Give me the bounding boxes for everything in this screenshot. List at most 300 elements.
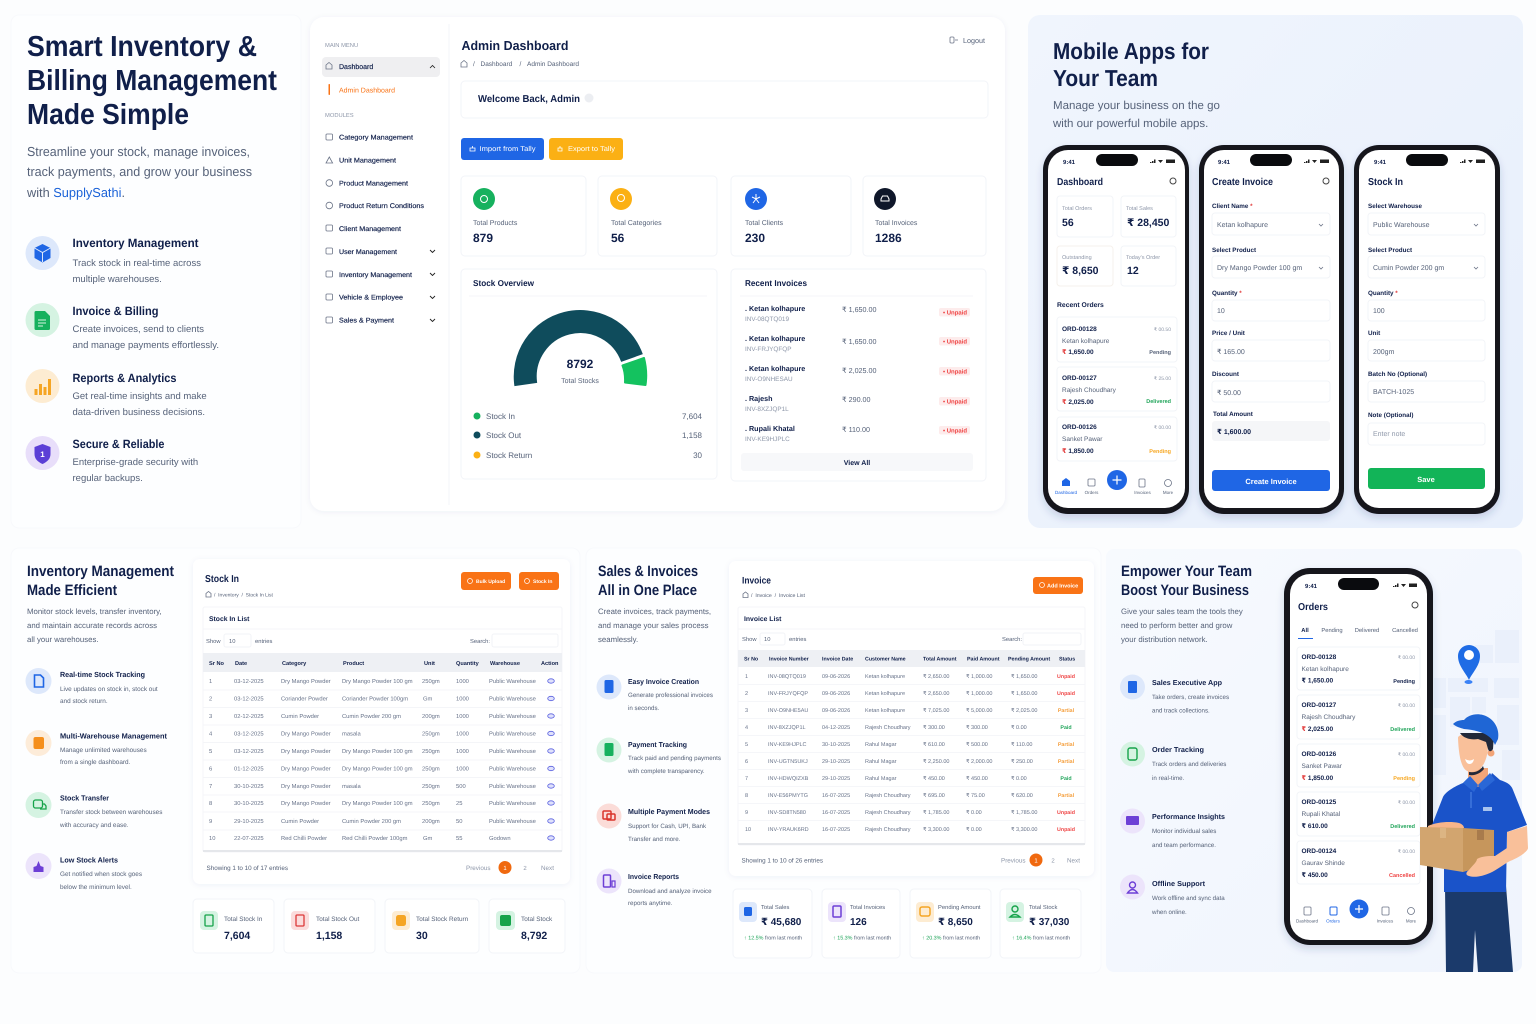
summary: total stock out: 1,158 bbox=[316, 930, 342, 942]
table: stock in: Public Warehouse bbox=[489, 713, 536, 720]
phone: orders: Pending bbox=[1393, 679, 1415, 685]
phone: orders: Orders bbox=[1326, 918, 1341, 924]
feature: payment tracking: with complete transparency. bbox=[627, 768, 705, 775]
card: stock in list: 10 bbox=[229, 638, 235, 645]
description bbox=[1052, 100, 1220, 130]
table: stock in: 03-12-2025 bbox=[234, 696, 264, 702]
description bbox=[598, 607, 711, 644]
table: invoices: ₹ 1,785.00 bbox=[1011, 809, 1037, 816]
feature: multiple payment modes: Transfer and more. bbox=[628, 836, 681, 843]
table: stock in: 03-12-2025 bbox=[234, 748, 264, 755]
button: bulk upload: Bulk Upload bbox=[476, 579, 505, 585]
table: stock in: 1000 bbox=[456, 713, 469, 720]
card: invoice list: Invoice List bbox=[744, 616, 782, 623]
table: stock in bbox=[203, 653, 562, 852]
button: stock in: Stock In bbox=[533, 579, 552, 585]
table: stock in: 2 bbox=[209, 696, 212, 702]
phone: orders: All bbox=[1301, 627, 1309, 634]
sidebar: Product Return Conditions bbox=[339, 203, 425, 210]
pagination: 1 bbox=[1034, 858, 1038, 864]
table: invoices: ₹ 3,300.00 bbox=[923, 826, 949, 833]
phone: orders: Gaurav Shinde bbox=[1302, 860, 1345, 867]
panel: recent invoices: INV-KE9HJPLC bbox=[745, 436, 790, 443]
phone: dashboard: ORD-00127 bbox=[1062, 375, 1097, 382]
phone: create invoice: ₹ 50.00 bbox=[1217, 389, 1241, 397]
card: invoice list bbox=[729, 561, 1094, 876]
table: invoices: 4 bbox=[745, 725, 748, 731]
card: stock in list: Search: bbox=[470, 638, 490, 645]
table: stock in: Cumin Powder 200 gm bbox=[342, 713, 401, 720]
phone: dashboard: Dashboard bbox=[1057, 177, 1103, 188]
phone: dashboard: Pending bbox=[1149, 449, 1171, 455]
phone: dashboard: Outstanding bbox=[1062, 255, 1092, 261]
sidebar: MODULES bbox=[325, 112, 354, 119]
panel: stock overview bbox=[461, 269, 717, 479]
table: invoices: 04-12-2025 bbox=[822, 725, 850, 731]
table: invoices: 29-10-2025 bbox=[822, 759, 850, 765]
panel: recent invoices: ₹ 2,025.00 bbox=[842, 366, 877, 375]
button: add invoice bbox=[1033, 577, 1083, 594]
card: invoice list: Show bbox=[742, 636, 757, 643]
table: stock in: Dry Mango Powder bbox=[281, 748, 331, 755]
feature: reports and analytics: data-driven business decisions. bbox=[72, 407, 205, 418]
summary: total stock return bbox=[385, 899, 479, 953]
phone: stock in: 200gm bbox=[1373, 349, 1395, 356]
feature: stock transfer: with accuracy and ease. bbox=[59, 822, 129, 829]
feature: multi-warehouse management: Multi-Warehouse Management bbox=[60, 732, 168, 740]
panel: recent invoices: • Unpaid bbox=[943, 338, 967, 346]
panel: recent invoices: • Unpaid bbox=[943, 428, 967, 434]
feature: sales executive app: and track collections. bbox=[1152, 708, 1210, 714]
table: invoices: 3 bbox=[745, 708, 748, 714]
sidebar: Unit Management bbox=[339, 158, 396, 164]
table: stock in: 1 bbox=[209, 679, 212, 685]
page header: Logout bbox=[963, 36, 985, 45]
table: stock in: masala bbox=[342, 783, 361, 790]
phone: dashboard: Invoices bbox=[1134, 490, 1152, 495]
feature: reports and analytics: Reports & Analytics bbox=[72, 371, 177, 385]
table: stock in: Public Warehouse bbox=[489, 766, 536, 772]
heading: Mobile Apps for bbox=[1053, 38, 1209, 64]
sidebar: Vehicle & Employee bbox=[339, 294, 403, 302]
heading: Inventory Management bbox=[27, 563, 174, 580]
table: stock in: Coriander Powder bbox=[281, 696, 328, 702]
table: invoices: 8 bbox=[745, 793, 748, 799]
feature: inventory management: multiple warehouses. bbox=[72, 274, 162, 285]
feature: inventory management: Track stock in real-time across bbox=[72, 258, 201, 269]
table: stock in: Red Chilli Powder bbox=[281, 835, 327, 842]
legend: Stock In bbox=[486, 412, 515, 421]
table: stock in: 250gm bbox=[422, 730, 440, 738]
panel: recent invoices: . Ketan kolhapure bbox=[745, 334, 805, 343]
table: invoices: INV-KE9HJPLC bbox=[768, 742, 807, 748]
phone: create invoice: 9:41 bbox=[1218, 159, 1231, 166]
panel: sales and invoices section bbox=[586, 548, 1101, 973]
phone: dashboard: Total Orders bbox=[1062, 206, 1092, 212]
description bbox=[1121, 607, 1243, 644]
title: Made Simple bbox=[27, 99, 189, 131]
phone: orders: Cancelled bbox=[1392, 627, 1418, 634]
phone: create invoice: Create Invoice bbox=[1245, 477, 1297, 486]
table: invoices: ₹ 500.00 bbox=[966, 741, 988, 748]
page header: Admin Dashboard bbox=[462, 38, 569, 53]
table: invoices: Pending Amount bbox=[1008, 656, 1050, 662]
feature: stock transfer: Stock Transfer bbox=[60, 794, 109, 802]
phone: create invoice: Ketan kolhapure bbox=[1217, 221, 1268, 229]
card: stock in list: / Inventory / Stock In List bbox=[214, 592, 274, 598]
table: stock in: 02-12-2025 bbox=[234, 713, 264, 720]
table: stock in: Godown bbox=[489, 835, 511, 842]
table: stock in: Action bbox=[541, 660, 559, 667]
table: invoices: INV-UGTN5UKJ bbox=[768, 759, 808, 765]
summary: total sales: ₹ 45,680 bbox=[761, 917, 802, 928]
description: Give your sales team the tools they bbox=[1121, 607, 1243, 616]
phone: stock in: Select Product bbox=[1368, 247, 1413, 254]
summary: total stock in bbox=[193, 899, 274, 953]
table: invoices: Partial bbox=[1058, 759, 1075, 765]
table: invoices: INV-08QTQ019 bbox=[768, 674, 806, 680]
phone: dashboard: 12 bbox=[1127, 265, 1139, 277]
heading bbox=[1121, 563, 1252, 599]
table: stock in: 6 bbox=[209, 766, 212, 772]
table: stock in: Dry Mango Powder bbox=[281, 800, 331, 807]
panel: team empowerment section bbox=[1106, 549, 1528, 972]
feature: easy invoice creation: in seconds. bbox=[628, 705, 660, 712]
description: and manage your sales process bbox=[598, 621, 709, 630]
table: invoices: Paid Amount bbox=[967, 656, 1000, 662]
button: stock in bbox=[519, 572, 559, 590]
table: invoices: INV-HDWQIZXB bbox=[768, 776, 809, 782]
table: invoices: INV-SD8TN580 bbox=[768, 810, 806, 816]
table: invoices: ₹ 1,650.00 bbox=[1011, 673, 1037, 680]
panel: recent invoices: ₹ 110.00 bbox=[842, 425, 870, 434]
table: invoices: Invoice Number bbox=[769, 656, 809, 662]
table: invoices: ₹ 1,785.00 bbox=[923, 809, 949, 816]
feature: low stock alerts bbox=[26, 853, 142, 891]
stat card: total clients: Total Clients bbox=[745, 219, 784, 227]
summary: total stock return: Total Stock Return bbox=[416, 916, 469, 923]
heading: Your Team bbox=[1053, 65, 1158, 91]
feature: secure and reliable bbox=[26, 436, 198, 484]
phone: create invoice: Price / Unit bbox=[1212, 330, 1246, 337]
phone: create invoice: Client Name * bbox=[1212, 203, 1253, 210]
stat card: total clients: 230 bbox=[745, 231, 765, 245]
phone: stock in: 100 bbox=[1373, 308, 1385, 315]
panel: recent invoices: • Unpaid bbox=[943, 368, 967, 376]
table: invoices: Invoice Date bbox=[822, 656, 853, 662]
panel: recent invoices: INV-8XZJQP1L bbox=[745, 406, 789, 413]
table: invoices: ₹ 300.00 bbox=[966, 724, 988, 731]
phone: orders: Orders bbox=[1298, 602, 1328, 613]
page header: / bbox=[520, 61, 522, 68]
feature: invoice and billing: and manage payments effortlessly. bbox=[72, 340, 219, 351]
summary: total stock bbox=[489, 899, 565, 953]
table: stock in: 03-12-2025 bbox=[234, 678, 264, 685]
phone: orders: Rajesh Choudhary bbox=[1302, 714, 1356, 721]
table: invoices: Sr No bbox=[744, 656, 759, 662]
table: invoices: 09-06-2026 bbox=[822, 708, 850, 714]
table: invoices: 16-07-2025 bbox=[822, 793, 850, 799]
table: stock in: Quantity bbox=[456, 660, 480, 667]
phone: dashboard: 9:41 bbox=[1063, 159, 1076, 166]
feature: real-time stock tracking bbox=[26, 668, 158, 705]
intro paragraph bbox=[26, 144, 252, 200]
description: your distribution network. bbox=[1121, 635, 1208, 644]
table: stock in: 29-10-2025 bbox=[234, 818, 264, 825]
panel: recent invoices: . Rajesh bbox=[745, 394, 773, 403]
table: invoices: Partial bbox=[1058, 793, 1075, 799]
stat card: total categories: 56 bbox=[611, 231, 625, 245]
table: invoices: ₹ 2,250.00 bbox=[923, 758, 949, 765]
phone: dashboard bbox=[1043, 145, 1189, 514]
summary: total stock bbox=[1000, 889, 1081, 958]
pagination: Showing 1 to 10 of 26 entries bbox=[742, 858, 823, 864]
table: invoices: Status bbox=[1059, 656, 1075, 662]
feature: low stock alerts: Get notified when stock goes bbox=[60, 871, 142, 878]
feature: secure and reliable: Secure & Reliable bbox=[72, 437, 165, 451]
panel: inventory management section bbox=[11, 548, 580, 973]
heading: Empower Your Team bbox=[1121, 563, 1252, 580]
table: invoices: Ketan kolhapure bbox=[865, 708, 905, 714]
phone: dashboard: Rajesh Choudhary bbox=[1062, 387, 1117, 394]
summary: total stock: ↑ 16.4% from last month bbox=[1012, 936, 1070, 942]
table: invoices: 29-10-2025 bbox=[822, 776, 850, 782]
phone: dashboard: Ketan kolhapure bbox=[1062, 338, 1110, 345]
table: stock in: 250gm bbox=[422, 678, 440, 685]
panel: recent invoices: Recent Invoices bbox=[745, 278, 807, 288]
phone: create invoice: Discount bbox=[1212, 371, 1240, 378]
table: stock in: 9 bbox=[209, 818, 212, 825]
card: stock in list: entries bbox=[255, 638, 273, 645]
phone: dashboard: ₹ 8,650 bbox=[1062, 265, 1099, 277]
legend: Stock Out bbox=[486, 431, 522, 440]
feature: invoice reports: Invoice Reports bbox=[628, 872, 679, 881]
phone: orders: Dashboard bbox=[1296, 918, 1319, 924]
summary: total stock: 8,792 bbox=[521, 930, 547, 942]
table: stock in: 250gm bbox=[422, 766, 440, 772]
table: stock in: Public Warehouse bbox=[489, 748, 536, 755]
phone: orders: Sanket Pawar bbox=[1302, 763, 1343, 770]
table: stock in: 1000 bbox=[456, 696, 469, 702]
table: stock in: Dry Mango Powder bbox=[281, 783, 331, 790]
table: stock in: Public Warehouse bbox=[489, 696, 536, 702]
table: invoices: Unpaid bbox=[1057, 827, 1075, 833]
page header: / bbox=[473, 61, 475, 68]
button: export to tally: Export to Tally bbox=[568, 145, 616, 153]
sidebar: Admin Dashboard bbox=[339, 86, 395, 94]
table: stock in: Date bbox=[235, 661, 247, 667]
phone: orders: Invoices bbox=[1377, 918, 1394, 924]
summary: total invoices bbox=[822, 889, 900, 958]
summary: total stock out bbox=[284, 899, 375, 953]
summary: total stock: Total Stock bbox=[1029, 904, 1057, 911]
table: invoices: 30-10-2025 bbox=[822, 742, 850, 748]
table: stock in: 4 bbox=[209, 732, 213, 738]
stat card: total invoices bbox=[863, 176, 986, 256]
card: invoice list: Search: bbox=[1002, 636, 1022, 643]
table: stock in: Red Chilli Powder 100gm bbox=[342, 835, 408, 842]
feature: sales executive app: Take orders, create invoices bbox=[1152, 694, 1229, 701]
intro paragraph: track payments, and grow your business bbox=[27, 164, 252, 179]
table: invoices: Paid bbox=[1060, 776, 1072, 782]
description: all your warehouses. bbox=[27, 635, 99, 644]
phone: create invoice bbox=[1199, 145, 1344, 514]
stat card: total products bbox=[461, 176, 586, 256]
table: invoices: ₹ 0.00 bbox=[1011, 775, 1027, 782]
table: invoices: INV-O9NHE5AU bbox=[768, 708, 808, 714]
feature: multiple payment modes: Multiple Payment Modes bbox=[628, 807, 710, 816]
summary: total sales: Total Sales bbox=[761, 904, 789, 911]
table: invoices: ₹ 2,650.00 bbox=[923, 673, 949, 680]
table: invoices: ₹ 1,000.00 bbox=[966, 673, 992, 680]
panel: recent invoices: INV-08QTQ019 bbox=[745, 316, 789, 323]
feature: order tracking: in real-time. bbox=[1152, 775, 1185, 782]
heading: All in One Place bbox=[598, 582, 697, 599]
legend: 1,158 bbox=[682, 431, 703, 440]
sidebar: MAIN MENU bbox=[325, 43, 358, 49]
table: invoices: ₹ 695.00 bbox=[923, 792, 945, 799]
table: invoices: ₹ 2,025.00 bbox=[1011, 707, 1037, 714]
feature: performance insights: Performance Insights bbox=[1152, 812, 1225, 821]
table: stock in: Public Warehouse bbox=[489, 783, 536, 790]
pagination: Previous bbox=[466, 865, 490, 872]
phone: orders: ₹ 00.00 bbox=[1398, 655, 1415, 661]
table: stock in: 03-12-2025 bbox=[234, 730, 264, 738]
phone: create invoice: ₹ 165.00 bbox=[1217, 348, 1245, 356]
stat card: total categories: Total Categories bbox=[611, 219, 662, 227]
phone: dashboard: Orders bbox=[1085, 490, 1099, 495]
feature: offline support bbox=[1120, 874, 1225, 916]
table: stock in: 01-12-2025 bbox=[234, 766, 264, 772]
feature: sales executive app: Sales Executive App bbox=[1152, 678, 1223, 687]
table: invoices: ₹ 0.00 bbox=[966, 826, 982, 833]
button: import from tally: Import from Tally bbox=[480, 145, 536, 153]
panel: recent invoices: . Ketan kolhapure bbox=[745, 364, 805, 373]
title: Smart Inventory & bbox=[27, 31, 257, 63]
phone: orders bbox=[1284, 568, 1433, 945]
panel: recent invoices: ₹ 1,650.00 bbox=[842, 337, 877, 346]
phone: stock in: Save bbox=[1417, 475, 1435, 484]
sidebar: Dashboard bbox=[339, 63, 373, 71]
description: with our powerful mobile apps. bbox=[1052, 118, 1208, 130]
card: invoice list: 10 bbox=[764, 636, 770, 643]
feature: performance insights bbox=[1120, 808, 1225, 849]
feature: sales executive app bbox=[1120, 674, 1229, 714]
table: stock in: Public Warehouse bbox=[489, 678, 536, 685]
table: stock in: Sr No bbox=[209, 661, 225, 667]
summary: total invoices: 126 bbox=[850, 917, 867, 928]
phone: orders: ₹ 00.00 bbox=[1398, 800, 1415, 806]
phone: create invoice: Quantity * bbox=[1212, 290, 1242, 297]
description: Monitor stock levels, transfer inventory, bbox=[27, 607, 162, 616]
table: invoices: ₹ 0.00 bbox=[1011, 724, 1027, 731]
table: stock in: Dry Mango Powder 100 gm bbox=[342, 766, 413, 772]
pagination: 2 bbox=[523, 865, 527, 872]
phone: orders: More bbox=[1406, 918, 1417, 924]
table: invoices: Rajesh Choudhary bbox=[865, 725, 911, 731]
intro paragraph: Streamline your stock, manage invoices, bbox=[27, 144, 250, 159]
phone: dashboard: 56 bbox=[1062, 217, 1074, 229]
table: invoices: 16-07-2025 bbox=[822, 827, 850, 833]
description: and maintain accurate records across bbox=[27, 621, 157, 630]
table: stock in: Category bbox=[282, 661, 307, 667]
phone: orders: Delivered bbox=[1390, 824, 1415, 830]
stat card: total products: 879 bbox=[473, 231, 493, 245]
phone: stock in: Quantity * bbox=[1368, 290, 1398, 297]
table: invoices bbox=[738, 650, 1085, 845]
gauge chart bbox=[525, 322, 646, 385]
table: stock in: 3 bbox=[209, 713, 212, 720]
table: stock in: 10 bbox=[209, 835, 215, 842]
phone: dashboard: ₹ 1,650.00 bbox=[1062, 349, 1094, 356]
summary: total sales bbox=[733, 889, 812, 958]
table: stock in: 50 bbox=[456, 818, 462, 825]
card: stock in list: Stock In bbox=[205, 574, 239, 585]
phone: dashboard: ₹ 2,025.00 bbox=[1062, 399, 1094, 406]
table: stock in: Public Warehouse bbox=[489, 730, 536, 738]
button: export to tally bbox=[549, 138, 623, 160]
heading bbox=[1053, 38, 1209, 91]
pagination: Previous bbox=[1001, 858, 1026, 864]
feature: reports and analytics: Get real-time insights and make bbox=[72, 391, 207, 402]
table: stock in: Coriander Powder 100gm bbox=[342, 696, 408, 702]
panel: recent invoices: INV-FRJYQFQP bbox=[745, 346, 792, 353]
phone: orders: ₹ 610.00 bbox=[1302, 823, 1328, 830]
feature: multi-warehouse management: Manage unlimited warehouses bbox=[60, 747, 147, 754]
table: invoices: Partial bbox=[1058, 742, 1075, 748]
panel: stock overview: Stock Overview bbox=[473, 278, 534, 288]
phone: orders: Rupali Khatal bbox=[1302, 811, 1341, 818]
panel: hero intro bbox=[11, 15, 301, 528]
table: invoices: ₹ 620.00 bbox=[1011, 792, 1033, 799]
phone: dashboard: Pending bbox=[1149, 350, 1171, 356]
table: invoices: 1 bbox=[745, 674, 748, 680]
legend: Stock Return bbox=[486, 451, 532, 460]
feature: payment tracking bbox=[596, 738, 721, 775]
table: invoices: 2 bbox=[745, 691, 748, 697]
table: invoices: INV-E56PMYTG bbox=[768, 793, 808, 799]
feature: secure and reliable: 1 bbox=[40, 450, 45, 459]
phone: create invoice: ₹ 1,600.00 bbox=[1217, 428, 1251, 436]
summary: pending amount: Pending Amount bbox=[938, 904, 981, 911]
feature: multi-warehouse management bbox=[26, 730, 168, 766]
feature: secure and reliable: regular backups. bbox=[72, 473, 143, 484]
phone: dashboard: Sanket Pawar bbox=[1062, 436, 1103, 443]
phone: stock in: Note (Optional) bbox=[1368, 412, 1413, 419]
table: invoices: ₹ 2,000.00 bbox=[966, 758, 992, 765]
panel: recent invoices: INV-O9NHESAU bbox=[745, 376, 793, 383]
sidebar: Product Management bbox=[339, 180, 408, 188]
stat card: total clients bbox=[731, 176, 851, 256]
sidebar: Client Management bbox=[339, 226, 401, 233]
button: bulk upload bbox=[461, 572, 511, 590]
heading bbox=[598, 563, 698, 599]
feature: low stock alerts: Low Stock Alerts bbox=[60, 856, 118, 864]
phone: orders: ORD-00128 bbox=[1302, 654, 1337, 661]
summary: pending amount bbox=[910, 889, 991, 958]
summary: total stock return: 30 bbox=[416, 930, 428, 942]
panel: recent invoices: ₹ 290.00 bbox=[842, 395, 871, 404]
page header bbox=[461, 36, 985, 68]
pagination: Next bbox=[541, 865, 554, 872]
legend: 7,604 bbox=[682, 412, 703, 421]
table: stock in: 1000 bbox=[456, 678, 469, 685]
table: stock in: 200gm bbox=[422, 818, 440, 825]
table: stock in: 200gm bbox=[422, 713, 440, 720]
feature: invoice and billing: Invoice & Billing bbox=[72, 304, 158, 318]
stat card: total categories bbox=[598, 176, 717, 256]
pagination: 1 bbox=[503, 865, 507, 872]
